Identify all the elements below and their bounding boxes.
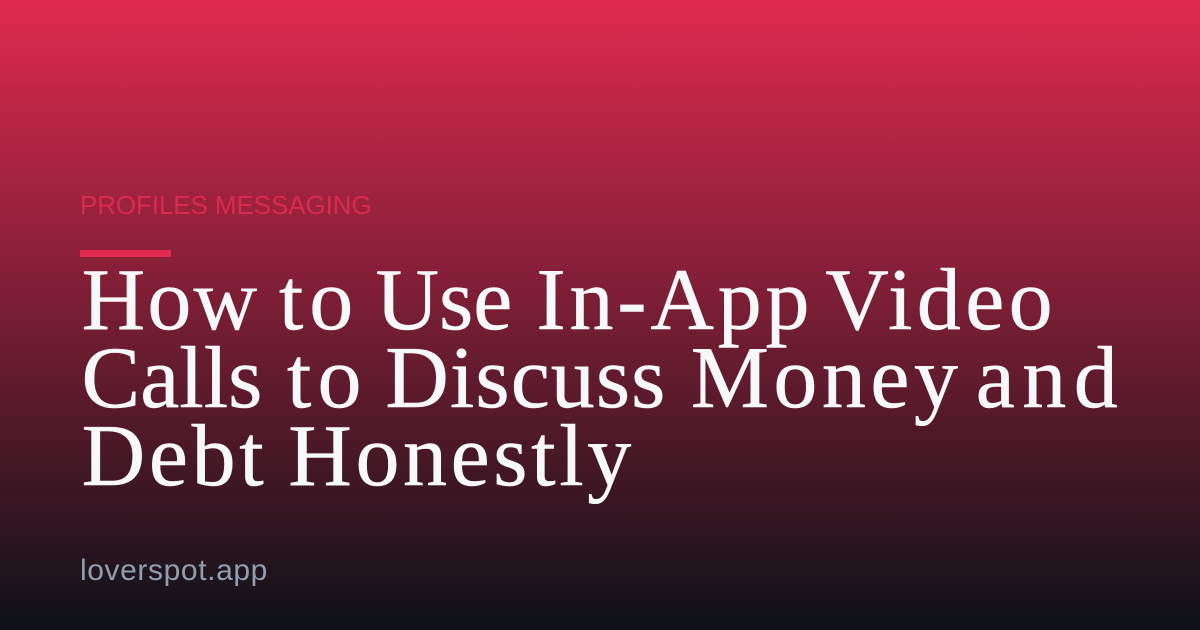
title: Use: [376, 252, 512, 349]
accent bar: [80, 250, 171, 257]
title: How: [82, 252, 259, 349]
site name: loverspot.app: [80, 554, 268, 587]
title: Discuss: [385, 330, 666, 427]
title: to: [279, 252, 359, 349]
title: Honestly: [288, 408, 635, 505]
title: to: [287, 330, 368, 427]
title: In-App: [536, 252, 813, 349]
title: Video: [825, 252, 1057, 349]
category label: PROFILES MESSAGING: [80, 190, 372, 220]
title: and: [976, 330, 1125, 427]
title: Debt: [82, 408, 267, 505]
title: [82, 252, 1125, 505]
title: Calls: [82, 330, 262, 427]
title: Money: [691, 330, 962, 427]
